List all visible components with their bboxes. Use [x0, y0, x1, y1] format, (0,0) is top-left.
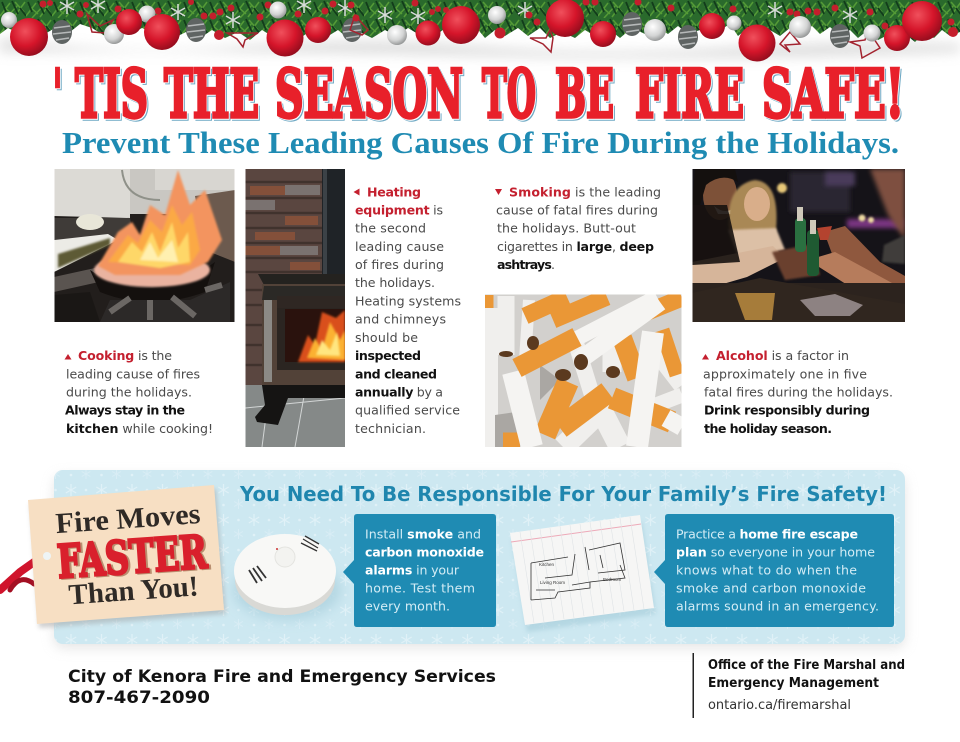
icon: escape plan sketch: Bedroom: [603, 577, 622, 582]
photo: flaming pan: [54, 169, 235, 322]
title: BE: [555, 55, 614, 133]
title: BE: [557, 57, 616, 135]
title: TO: [484, 57, 538, 135]
title: TIS: [75, 55, 148, 133]
text: heating equipment: [354, 184, 461, 436]
title: THE: [164, 55, 259, 133]
title: ': [55, 57, 64, 135]
callout: escape plan: [654, 514, 894, 627]
icon: escape plan sketch: Living Room: [540, 580, 565, 585]
footer: fire marshal office: ontario.ca/firemarshal: [708, 698, 851, 713]
text: alcohol: the holiday season.: [704, 421, 832, 436]
text: cooking: kitchen while cooking!: [66, 421, 213, 436]
ribbon: [0, 555, 44, 590]
footer: fire marshal office: Emergency Management: [708, 676, 879, 691]
text: heating equipment: qualified service: [355, 402, 460, 418]
text: smoking: cigarettes in large, deep: [497, 239, 654, 254]
icon: smoke alarm: [233, 534, 341, 620]
title: ': [54, 56, 63, 134]
callout: install alarms: every month.: [365, 598, 450, 614]
callout: install alarms: alarms in your: [365, 562, 460, 578]
text: cooking: Cooking is the: [78, 348, 172, 363]
title: TIS: [77, 57, 150, 135]
text: alcohol: Alcohol is a factor in: [716, 348, 849, 363]
text: cooking: during the holidays.: [66, 384, 192, 400]
tag: fire moves faster than you: FASTER: [55, 525, 209, 589]
text: heating equipment: the second: [355, 220, 426, 236]
tag: fire moves faster than you: [28, 485, 226, 628]
title: SEASON: [275, 55, 463, 133]
text: heating equipment: and chimneys: [355, 312, 446, 326]
text: cooking: Always stay in the: [65, 402, 185, 418]
footer: fire marshal office: Office of the Fire Marshal and: [708, 658, 905, 673]
panel: family fire safety: [54, 470, 905, 648]
text: heating equipment: of fires during: [355, 257, 444, 272]
subtitle: Prevent These Leading Causes Of Fire During the Holidays.: [62, 125, 899, 160]
title: FIRE: [636, 56, 745, 134]
text: alcohol: Drink responsibly during: [704, 402, 870, 418]
footer: city contact: [68, 667, 496, 708]
text: smoking: ashtrays.: [497, 257, 555, 272]
text: heating equipment: inspected: [355, 348, 421, 363]
callout: escape plan: alarms sound in an emergency.: [676, 598, 879, 614]
title: BE: [556, 56, 615, 134]
title: SEASON: [277, 57, 465, 135]
title: TO: [482, 55, 536, 133]
title: TO: [483, 56, 537, 134]
callout: install alarms: carbon monoxide: [365, 544, 484, 560]
icon: escape plan sketch: [510, 515, 656, 632]
callout: install alarms: [343, 514, 496, 627]
text: heating equipment: should be: [355, 330, 418, 345]
text: heating equipment: and cleaned: [355, 366, 437, 382]
callout: escape plan: Practice a home fire escape: [676, 526, 858, 542]
title: THE: [165, 56, 260, 134]
title: TIS: [76, 56, 149, 134]
footer: fire marshal office: [692, 653, 905, 718]
callout: escape plan: plan so everyone in your home: [676, 544, 875, 560]
icon: escape plan sketch: Kitchen: [539, 562, 555, 567]
title: FIRE: [635, 55, 744, 133]
text: cooking: leading cause of fires: [66, 366, 200, 382]
tag: fire moves faster than you: FASTER: [57, 526, 211, 590]
callout: install alarms: Install smoke and: [365, 526, 481, 542]
text: alcohol: [702, 348, 893, 436]
text: cooking: [64, 348, 213, 436]
panel heading: You Need To Be Responsible For Your Family’s Fire Safety!: [239, 482, 887, 506]
callout: escape plan: knows what to do when the: [676, 562, 857, 578]
photo: people toasting: [692, 169, 905, 322]
title: ': [53, 55, 62, 133]
text: alcohol: approximately one in five: [703, 366, 867, 382]
footer: city contact: 807-467-2090: [68, 688, 210, 708]
text: smoking: the holidays. Butt-out: [497, 220, 636, 236]
text: heating equipment: annually by a: [355, 384, 443, 400]
footer: city contact: City of Kenora Fire and Emergency Services: [68, 667, 496, 687]
photo: wood stove: [245, 169, 345, 447]
callout: escape plan: smoke and carbon monoxide: [676, 580, 866, 596]
tag: fire moves faster than you: Fire Moves: [55, 498, 201, 540]
callout: install alarms: home. Test them: [365, 580, 475, 596]
text: heating equipment: leading cause: [355, 239, 444, 254]
title: FIRE: [637, 57, 746, 135]
text: heating equipment: technician.: [355, 421, 426, 436]
text: smoking: cause of fatal fires during: [496, 202, 658, 218]
text: heating equipment: equipment is: [355, 202, 443, 218]
text: smoking: Smoking is the leading: [509, 184, 661, 200]
tag: fire moves faster than you: Than You!: [68, 570, 199, 611]
text: heating equipment: Heating: [367, 184, 421, 200]
title: SEASON: [276, 56, 464, 134]
text: alcohol: fatal fires during the holidays.: [704, 384, 893, 400]
text: smoking: [495, 184, 661, 272]
photo: cigarettes: [485, 294, 682, 447]
holiday garland: [0, 0, 960, 62]
text: heating equipment: the holidays.: [355, 275, 435, 290]
title: [53, 55, 906, 135]
title: THE: [166, 57, 261, 135]
text: heating equipment: Heating systems: [355, 294, 461, 308]
